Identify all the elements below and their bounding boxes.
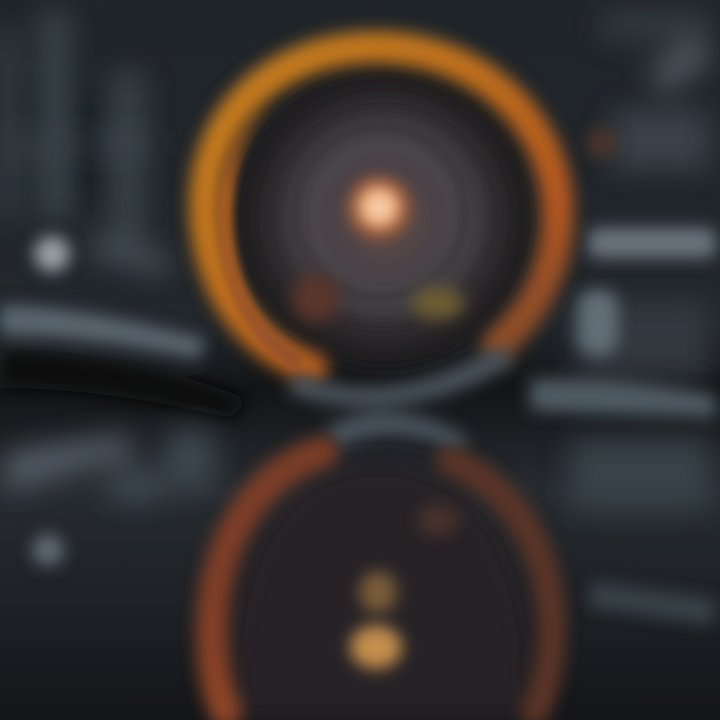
faint orange spot right: [587, 128, 617, 158]
dim spot lower left: [32, 534, 64, 566]
reflected ring assembly: [212, 452, 552, 720]
yellow smudge: [412, 287, 464, 319]
reflected upper glow: [359, 571, 397, 613]
background streaks: upper machinery: [0, 10, 713, 380]
reflected ring left: [212, 452, 322, 712]
reflected lower glow: [350, 625, 402, 669]
dark disk: [234, 68, 534, 368]
central glow: [339, 167, 419, 247]
orange ring: [205, 47, 558, 368]
reflected disk: [224, 460, 536, 720]
upper ring assembly: [205, 47, 558, 368]
inner-left ring band: [225, 100, 300, 362]
left light band: [0, 305, 250, 418]
lower reflected streaks: [5, 430, 710, 510]
red smudge: [292, 274, 340, 322]
bright spot left: [34, 236, 70, 272]
grey crossing band between circle and reflection: [285, 345, 515, 452]
right light bars: [530, 228, 716, 625]
concentric rings inside disk: [269, 100, 499, 330]
reflected smudge: [416, 504, 460, 536]
reflected ring right: [450, 460, 552, 712]
